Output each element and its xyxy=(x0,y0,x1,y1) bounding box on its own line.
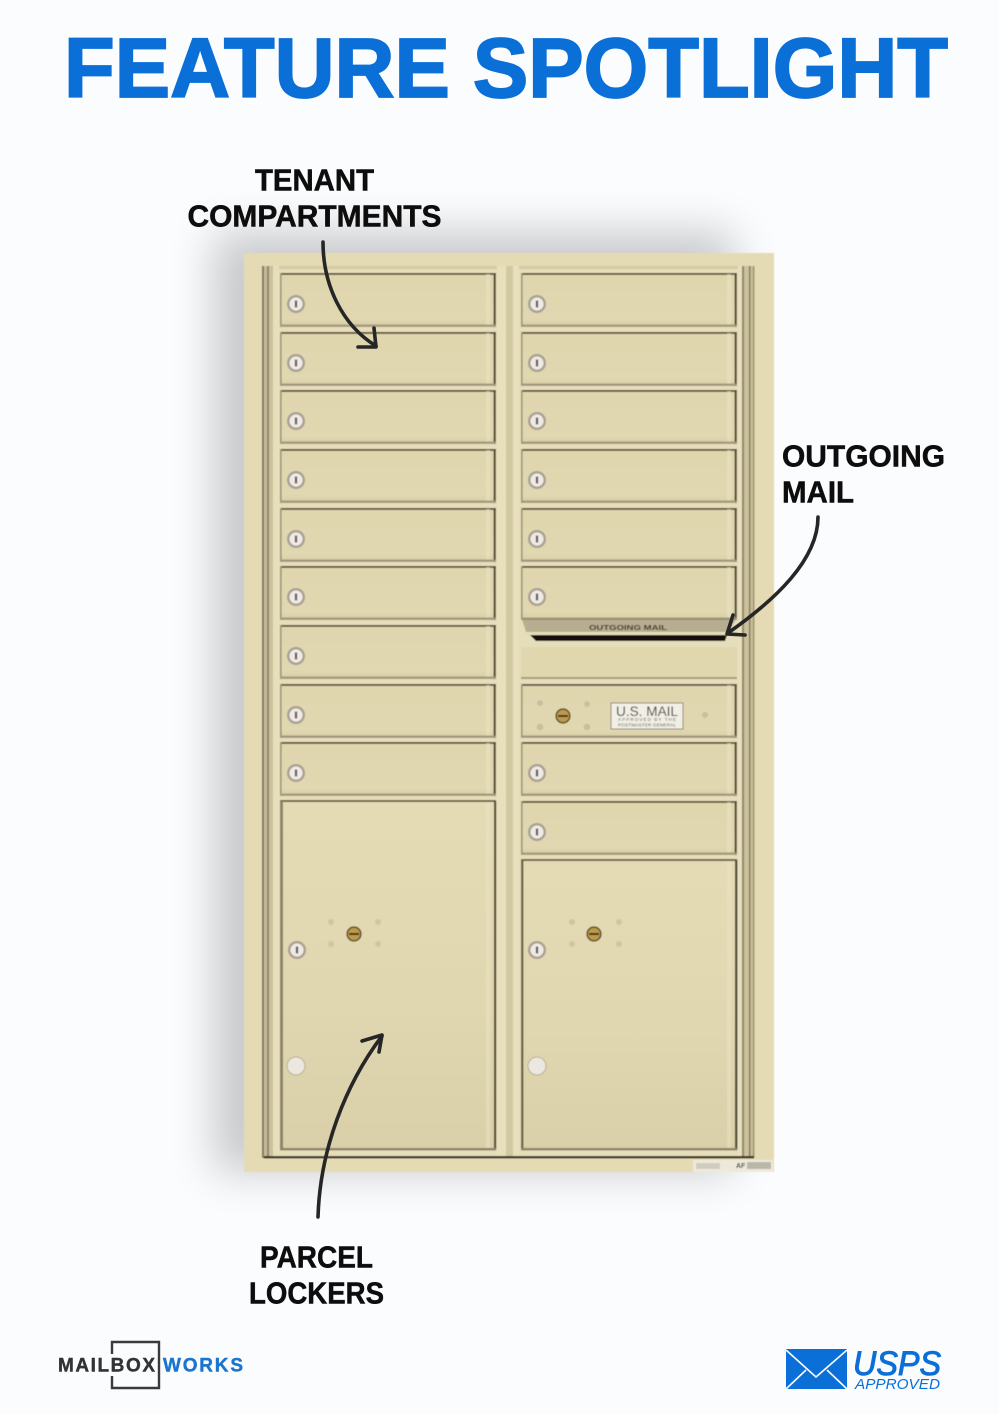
U.S. Mail plate: POSTMASTER GENERAL xyxy=(618,722,676,728)
postal panel xyxy=(521,684,737,738)
lock R7 xyxy=(528,764,546,782)
lock L5 xyxy=(287,530,305,548)
label: parcel lockers: LOCKERS xyxy=(249,1276,384,1310)
mailbox unit xyxy=(244,253,774,1172)
logo wordmark mailbox: MAILBOX xyxy=(58,1356,155,1376)
compartment R5 xyxy=(521,508,737,562)
arrow: tenant compartments xyxy=(323,242,376,347)
compartment L7 xyxy=(280,625,496,679)
compartment L9 xyxy=(280,742,496,796)
bottom dark edge xyxy=(264,1156,754,1158)
usps wordmark: USPS xyxy=(853,1345,941,1383)
label: parcel lockers xyxy=(249,1240,384,1310)
outgoing mail slot xyxy=(521,618,737,679)
outgoing mail label: OUTGOING MAIL xyxy=(589,623,668,632)
lock R5 xyxy=(528,530,546,548)
parcel cam right xyxy=(586,926,602,942)
mailbox shadow xyxy=(214,232,734,1172)
compartment R7 xyxy=(521,742,737,796)
centre mullion xyxy=(497,266,519,1158)
logo square xyxy=(112,1342,159,1388)
title: FEATURE SPOTLIGHT xyxy=(64,21,948,115)
lock L2 xyxy=(287,354,305,372)
lock L6 xyxy=(287,588,305,606)
lock L4 xyxy=(287,471,305,489)
compartment L4 xyxy=(280,449,496,503)
compartment L2 xyxy=(280,332,496,386)
label: tenant compartments: COMPARTMENTS xyxy=(188,198,442,234)
lock R8 xyxy=(528,823,546,841)
compartment R3 xyxy=(521,390,737,444)
parcel button left xyxy=(287,1057,305,1075)
parcel lock right xyxy=(528,941,546,959)
label: outgoing mail: MAIL xyxy=(782,474,854,510)
label: tenant compartments: TENANT xyxy=(255,162,374,198)
logo wordmark works: WORKS xyxy=(163,1356,243,1376)
logo: USPS approved xyxy=(786,1345,941,1393)
arrow: parcel lockers xyxy=(318,1035,382,1217)
lock L3 xyxy=(287,412,305,430)
parcel locker left xyxy=(280,800,496,1150)
lock R2 xyxy=(528,354,546,372)
label: tenant compartments xyxy=(188,162,442,234)
lock L8 xyxy=(287,706,305,724)
compartment L8 xyxy=(280,684,496,738)
right column compartments xyxy=(521,273,737,855)
parcel cam left xyxy=(346,926,362,942)
compartment R4 xyxy=(521,449,737,503)
compartment L1 xyxy=(280,273,496,327)
parcel locker right xyxy=(521,859,737,1150)
arrow: outgoing mail xyxy=(727,517,818,635)
right frame rails xyxy=(738,266,754,1158)
compartment L5 xyxy=(280,508,496,562)
cabinet body xyxy=(244,253,774,1172)
approved wordmark: APPROVED xyxy=(854,1376,940,1393)
lock L1 xyxy=(287,295,305,313)
manufacturer sticker xyxy=(693,1160,773,1172)
compartment R1 xyxy=(521,273,737,327)
lock L7 xyxy=(287,647,305,665)
U.S. Mail plate: APPROVED BY THE xyxy=(618,717,676,722)
postal lock xyxy=(555,708,571,724)
left frame rails xyxy=(262,266,279,1158)
compartment R6 xyxy=(521,566,737,620)
lock R3 xyxy=(528,412,546,430)
parcel lock left xyxy=(288,941,306,959)
U.S. Mail plate: U.S. MAIL xyxy=(616,704,678,719)
compartment R2 xyxy=(521,332,737,386)
compartment L6 xyxy=(280,566,496,620)
label: outgoing mail: OUTGOING xyxy=(782,438,945,474)
lock R4 xyxy=(528,471,546,489)
logo: Mailbox Works xyxy=(58,1342,243,1388)
lock R1 xyxy=(528,295,546,313)
manufacturer sticker: AF xyxy=(736,1163,746,1170)
left column compartments xyxy=(280,273,496,796)
lock L9 xyxy=(287,764,305,782)
outgoing mail flap xyxy=(522,619,736,632)
slot opening xyxy=(530,635,727,641)
lock R6 xyxy=(528,588,546,606)
U.S. Mail plate xyxy=(611,703,683,729)
label: outgoing mail xyxy=(782,438,945,510)
icon: envelope xyxy=(786,1349,847,1389)
compartment R8 xyxy=(521,801,737,855)
label: parcel lockers: PARCEL xyxy=(260,1240,373,1274)
panel below slot xyxy=(521,647,737,679)
compartment L3 xyxy=(280,390,496,444)
parcel button right xyxy=(528,1057,546,1075)
